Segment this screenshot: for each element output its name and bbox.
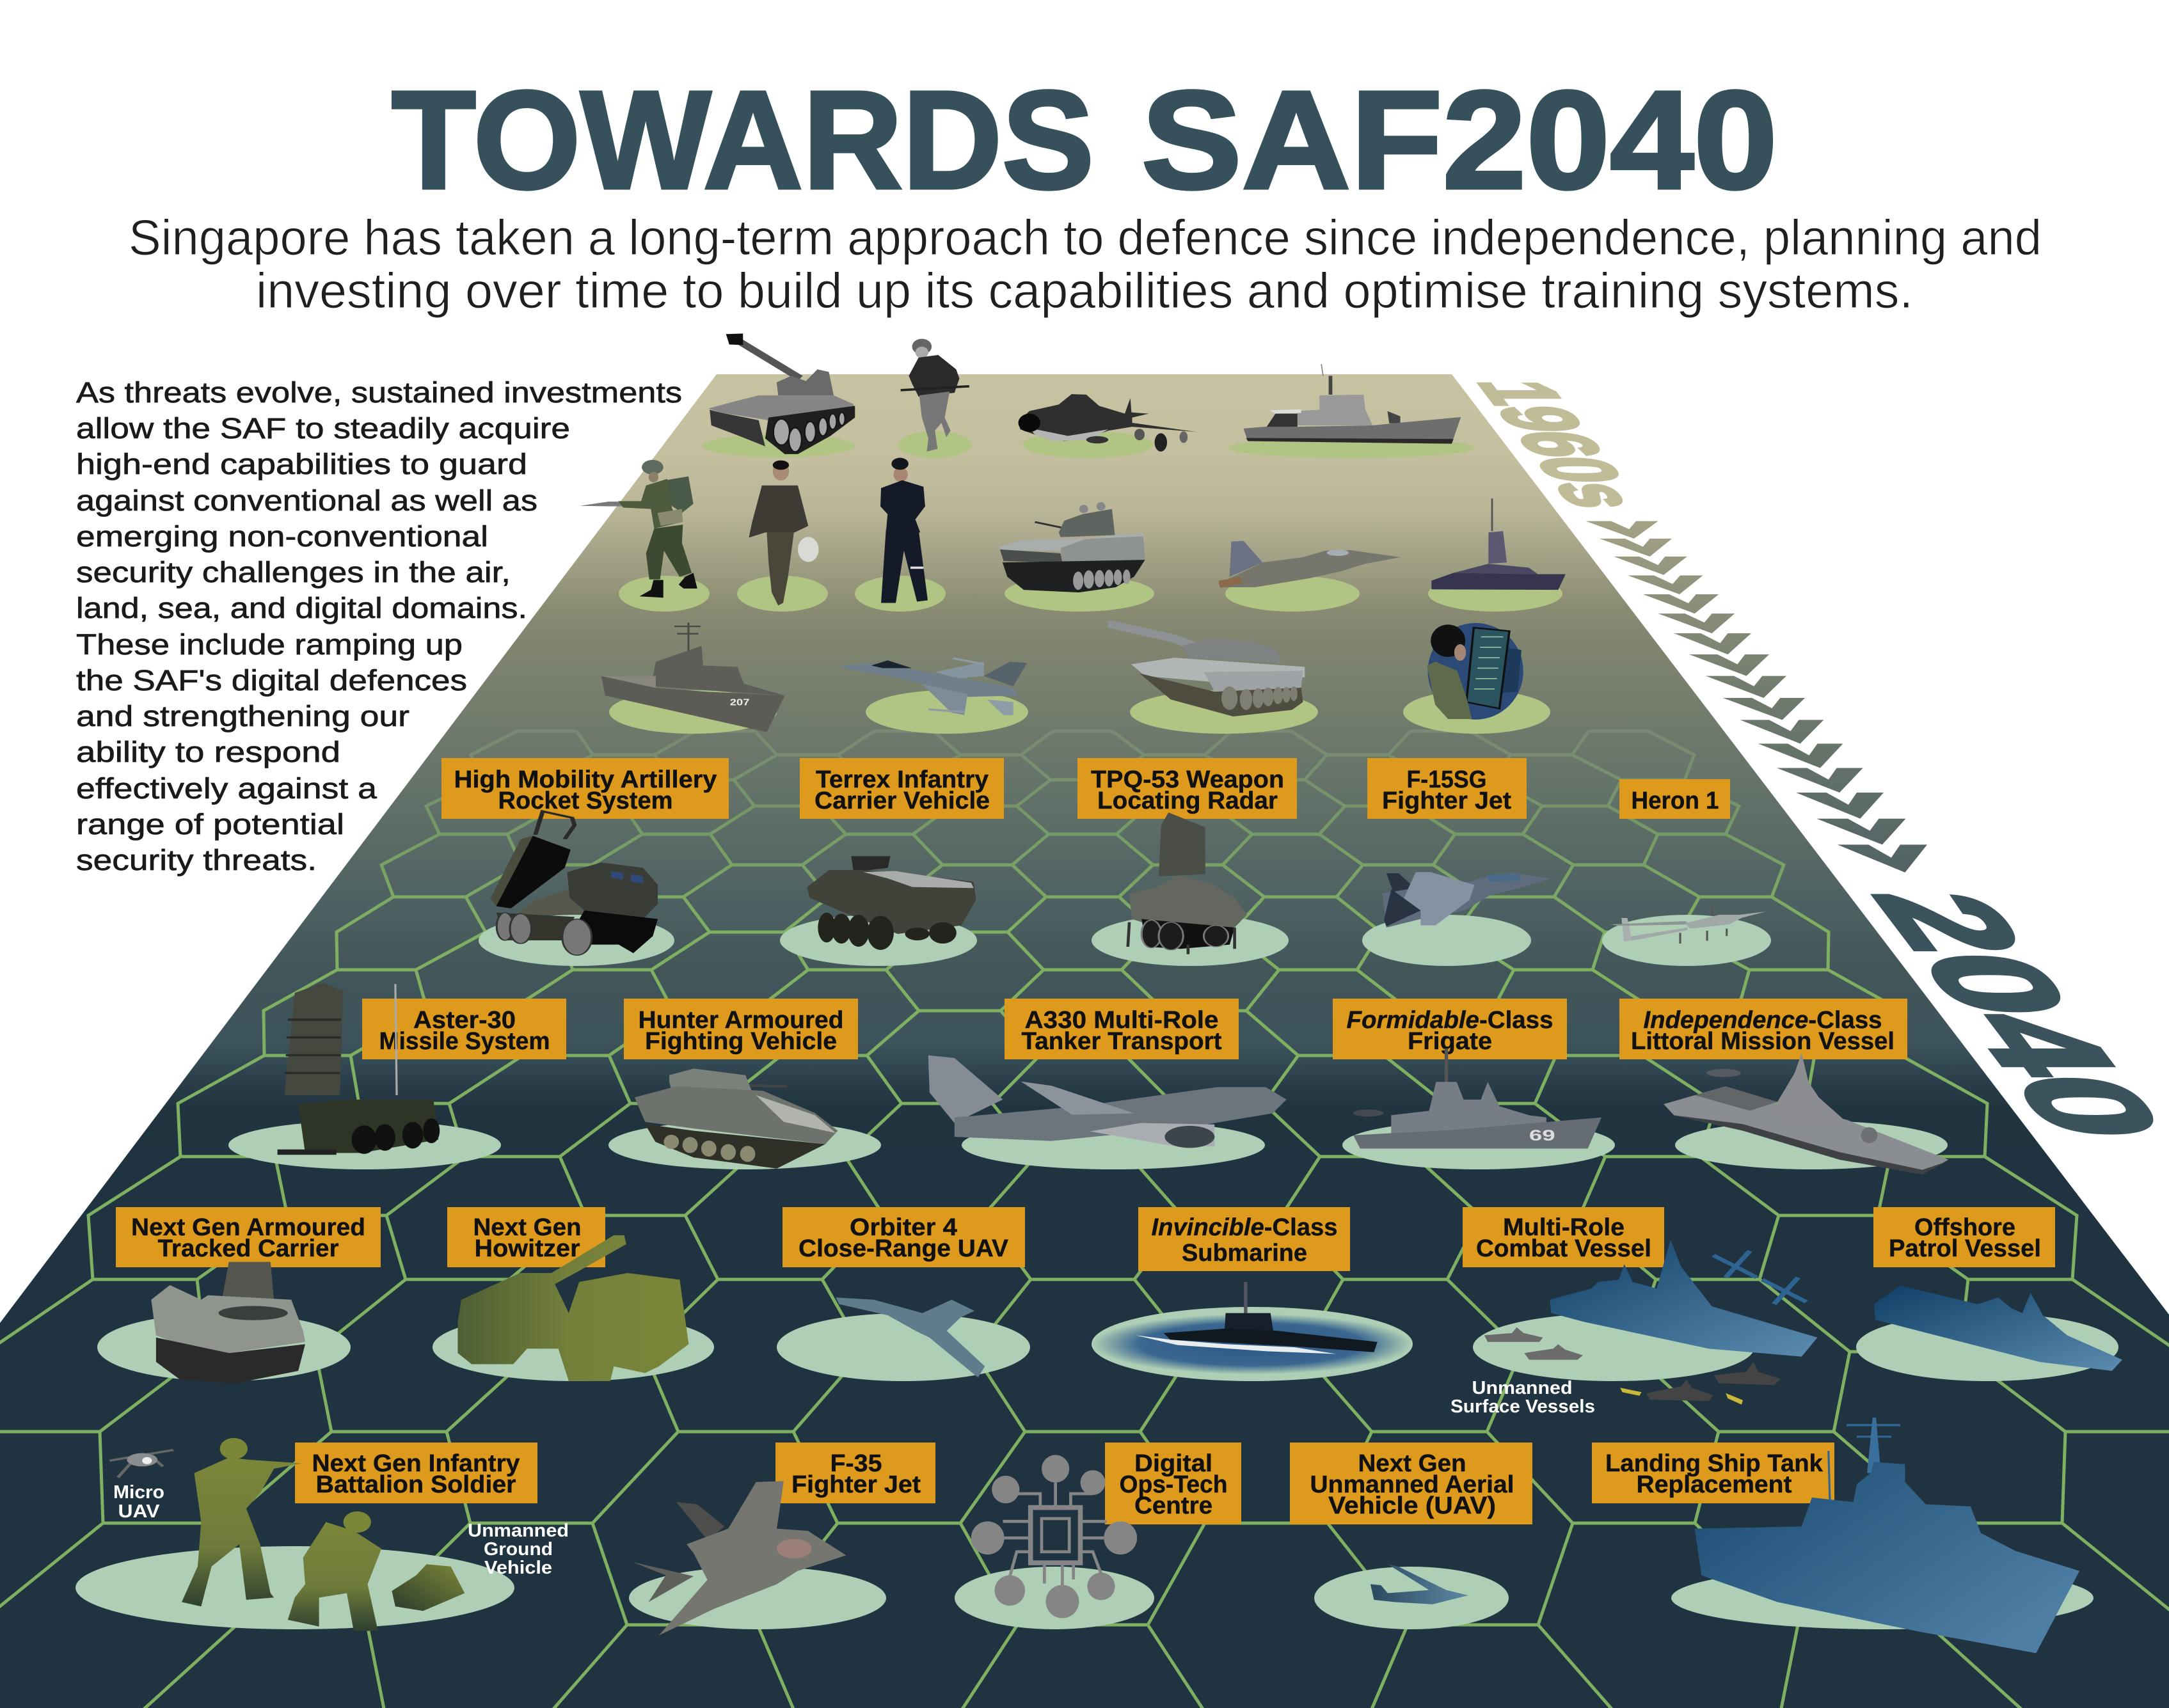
- label: Multi-Role Combat Vessel: Multi-Role: [1503, 1214, 1625, 1241]
- label: Invincible-Class Submarine: [1138, 1207, 1350, 1271]
- timeline label: 1960s: 1960s: [1456, 381, 1664, 508]
- intro paragraph: the SAF's digital defences: [76, 664, 467, 697]
- label: Next Gen Armoured Tracked Carrier: [116, 1207, 381, 1267]
- icon: missile gunboat: [1431, 498, 1566, 590]
- icon: Heron UAV: [1610, 906, 1766, 944]
- label: Next Gen Unmanned Aerial Vehicle (UAV): Vehicle (UAV): [1328, 1492, 1496, 1519]
- intro paragraph: land, sea, and digital domains.: [76, 592, 527, 624]
- icon: TPQ-53 radar: [1128, 812, 1247, 954]
- icon: infantry soldier: [580, 460, 697, 597]
- label: Invincible-Class Submarine: Invincible-Class: [1152, 1214, 1337, 1241]
- label: Next Gen Armoured Tracked Carrier: Next Gen Armoured: [131, 1214, 365, 1241]
- label: F-15SG Fighter Jet: F-15SG: [1406, 766, 1487, 793]
- icon: Next Gen Howitzer silhouette: [457, 1235, 688, 1381]
- icon: A330 tanker: [928, 1056, 1287, 1148]
- icon: Formidable frigate: [1353, 1048, 1601, 1148]
- label: Independence-Class Littoral Mission Vessel: Independence-Class: [1643, 1007, 1882, 1034]
- label: Next Gen Infantry Battalion Soldier: Battalion Soldier: [316, 1471, 516, 1498]
- icon: HIMARS: [490, 811, 658, 955]
- intro paragraph: These include ramping up: [76, 628, 463, 661]
- icon: Hunter jet: [1019, 394, 1196, 452]
- label: Orbiter 4 Close-Range UAV: Orbiter 4: [850, 1214, 957, 1241]
- icon: Next Gen Armoured Tracked Carrier: [151, 1262, 305, 1383]
- icon: air force pilot: [749, 461, 819, 606]
- intro paragraph: security threats.: [76, 844, 317, 876]
- intro paragraph: allow the SAF to steadily acquire: [76, 412, 570, 445]
- icon: Formidable frigate: 69: [1529, 1127, 1555, 1144]
- icon: Leopard tank: [1108, 621, 1305, 716]
- label: Next Gen Unmanned Aerial Vehicle (UAV): Next Gen: [1358, 1450, 1466, 1477]
- text: Unmanned Ground Vehicle: Ground: [484, 1539, 553, 1560]
- label: TPQ-53 Weapon Locating Radar: TPQ-53 Weapon: [1091, 766, 1284, 793]
- label: Next Gen Howitzer: Howitzer: [475, 1235, 580, 1262]
- icon: AMX-13 tank: [709, 333, 855, 454]
- intro paragraph: emerging non-conventional: [76, 520, 488, 553]
- icon: running soldier: [901, 339, 969, 452]
- intro paragraph: ability to respond: [76, 736, 340, 768]
- label: Offshore Patrol Vessel: [1873, 1207, 2055, 1267]
- icon: Orbiter 4 UAV: [836, 1297, 985, 1377]
- label: Next Gen Armoured Tracked Carrier: Tracked Carrier: [157, 1235, 339, 1262]
- label: Next Gen Unmanned Aerial Vehicle (UAV): Unmanned Aerial: [1310, 1471, 1514, 1498]
- label: A330 Multi-Role Tanker Transport: A330 Multi-Role: [1025, 1007, 1218, 1034]
- text: Micro UAV: [113, 1482, 164, 1522]
- icon: patrol boat: [1243, 364, 1461, 444]
- title: TOWARDS: [392, 63, 1094, 218]
- label: Multi-Role Combat Vessel: Combat Vessel: [1476, 1235, 1651, 1262]
- text: Micro UAV: UAV: [118, 1501, 160, 1522]
- label: Terrex Infantry Carrier Vehicle: Terrex Infantry: [816, 766, 989, 793]
- text: Unmanned Surface Vessels: Unmanned: [1472, 1378, 1573, 1398]
- icon: digital circuit network: [971, 1455, 1137, 1618]
- icon: landing ship: [601, 622, 785, 732]
- text: Unmanned Surface Vessels: [1450, 1378, 1595, 1417]
- label: Formidable-Class Frigate: Formidable-Class: [1346, 1007, 1553, 1034]
- icon: Offshore Patrol Vessel silhouette: [1874, 1286, 2122, 1371]
- label: Heron 1: [1619, 779, 1730, 819]
- label: Offshore Patrol Vessel: Offshore: [1914, 1214, 2015, 1241]
- label: Digital Ops-Tech Centre: Centre: [1134, 1492, 1212, 1519]
- icon: Landing Ship Tank Replacement silhouette: [1695, 1418, 2079, 1653]
- label: High Mobility Artillery Rocket System: Rocket System: [498, 787, 673, 814]
- label: Terrex Infantry Carrier Vehicle: [800, 758, 1004, 819]
- text: Unmanned Ground Vehicle: Vehicle: [484, 1558, 552, 1578]
- label: TPQ-53 Weapon Locating Radar: Locating Radar: [1097, 787, 1278, 814]
- intro paragraph: As threats evolve, sustained investments: [76, 376, 682, 409]
- icon: cyber operator: [1427, 623, 1523, 720]
- label: Aster-30 Missile System: [362, 999, 566, 1059]
- label: Digital Ops-Tech Centre: Digital: [1134, 1450, 1212, 1477]
- label: Orbiter 4 Close-Range UAV: Close-Range UAV: [798, 1235, 1009, 1262]
- label: Next Gen Unmanned Aerial Vehicle (UAV): [1290, 1443, 1532, 1524]
- label: Hunter Armoured Fighting Vehicle: Fighting Vehicle: [645, 1028, 837, 1055]
- icon: landing ship: 207: [730, 697, 749, 708]
- icon: Multi-Role Combat Vessel silhouette: [1550, 1240, 1818, 1357]
- subtitle: Singapore has taken a long-term approach to defence since independence, planning and: [129, 209, 2042, 265]
- icon: F-5 fighter: [1218, 541, 1401, 588]
- icon: F-35 fighter: [633, 1481, 846, 1635]
- intro paragraph: high-end capabilities to guard: [76, 448, 527, 480]
- label: F-15SG Fighter Jet: [1367, 758, 1527, 819]
- title: SAF2040: [1141, 63, 1777, 218]
- label: Aster-30 Missile System: Aster-30: [413, 1007, 516, 1034]
- label: Multi-Role Combat Vessel: [1463, 1207, 1664, 1267]
- label: Orbiter 4 Close-Range UAV: [783, 1207, 1025, 1267]
- label: A330 Multi-Role Tanker Transport: Tanker Transport: [1021, 1028, 1222, 1055]
- label: Terrex Infantry Carrier Vehicle: Carrier Vehicle: [814, 787, 990, 814]
- label: Heron 1: Heron 1: [1632, 787, 1719, 814]
- icon: micro UAV: [109, 1450, 173, 1478]
- label: F-15SG Fighter Jet: Fighter Jet: [1382, 787, 1511, 814]
- label: Next Gen Infantry Battalion Soldier: Next Gen Infantry: [312, 1450, 520, 1477]
- subtitle: [129, 209, 2042, 319]
- timeline chevrons: [1585, 521, 1927, 873]
- label: F-35 Fighter Jet: F-35: [830, 1450, 882, 1477]
- label: Formidable-Class Frigate: [1333, 999, 1567, 1059]
- label: Digital Ops-Tech Centre: [1105, 1443, 1241, 1524]
- icon: Hunter AFV: [635, 1068, 838, 1169]
- label: Invincible-Class Submarine: Submarine: [1182, 1240, 1307, 1267]
- label: TPQ-53 Weapon Locating Radar: [1077, 758, 1297, 819]
- label: High Mobility Artillery Rocket System: High Mobility Artillery: [454, 766, 717, 793]
- icon: Next Gen UAV silhouette: [1371, 1564, 1468, 1604]
- label: Landing Ship Tank Replacement: [1592, 1443, 1834, 1503]
- label: F-35 Fighter Jet: Fighter Jet: [791, 1471, 921, 1498]
- icon: Invincible submarine: [1092, 1282, 1412, 1375]
- icon: F-16 fighter: [839, 658, 1027, 715]
- label: Independence-Class Littoral Mission Vessel: Littoral Mission Vessel: [1631, 1028, 1895, 1055]
- intro paragraph: security challenges in the air,: [76, 556, 511, 589]
- label: Independence-Class Littoral Mission Vessel: [1619, 999, 1907, 1059]
- ground ellipses: legacy rows: [609, 431, 1562, 734]
- icon: F-15SG: [1383, 872, 1550, 928]
- icon: unmanned surface vessels: [1484, 1327, 1781, 1405]
- label: Landing Ship Tank Replacement: Replacement: [1637, 1471, 1792, 1498]
- icon: Independence littoral mission vessel: [1664, 1053, 1948, 1174]
- hexagon grid: [0, 731, 2169, 1708]
- subtitle: investing over time to build up its capabilities and optimise training systems.: [256, 262, 1913, 319]
- label: High Mobility Artillery Rocket System: [441, 758, 729, 819]
- label: Formidable-Class Frigate: Frigate: [1408, 1028, 1492, 1055]
- timeline label: 2040: 2040: [1839, 892, 2169, 1137]
- icon: Bionix infantry fighting vehicle: [999, 502, 1145, 592]
- label: Landing Ship Tank Replacement: Landing Ship Tank: [1605, 1450, 1823, 1477]
- label: Offshore Patrol Vessel: Patrol Vessel: [1889, 1235, 2041, 1262]
- intro paragraph: range of potential: [76, 808, 344, 841]
- label: Next Gen Infantry Battalion Soldier: [295, 1443, 537, 1503]
- text: Unmanned Surface Vessels: Surface Vessels: [1450, 1396, 1595, 1417]
- icon: Aster-30 launcher: [278, 983, 440, 1155]
- label: Hunter Armoured Fighting Vehicle: [624, 999, 858, 1059]
- intro paragraph: [76, 376, 682, 876]
- intro paragraph: against conventional as well as: [76, 484, 537, 517]
- text: Micro UAV: Micro: [113, 1482, 164, 1503]
- icon: drones: [1713, 1251, 1806, 1304]
- icon: Terrex vehicle: [807, 856, 976, 950]
- text: Unmanned Ground Vehicle: [468, 1521, 569, 1578]
- label: A330 Multi-Role Tanker Transport: [1005, 999, 1239, 1059]
- label: Hunter Armoured Fighting Vehicle: Hunter Armoured: [639, 1007, 843, 1034]
- title: [392, 63, 1777, 218]
- text: Unmanned Ground Vehicle: Unmanned: [468, 1521, 569, 1541]
- label: Digital Ops-Tech Centre: Ops-Tech: [1120, 1471, 1227, 1498]
- intro paragraph: and strengthening our: [76, 700, 409, 732]
- ground ellipses: future rows: [75, 915, 2118, 1629]
- perspective floor panel: [0, 374, 2169, 1708]
- label: F-35 Fighter Jet: [775, 1443, 935, 1503]
- icon: Next Gen soldiers and ground vehicle silhouettes: [182, 1438, 465, 1631]
- intro paragraph: effectively against a: [76, 772, 377, 805]
- label: Aster-30 Missile System: Missile System: [379, 1028, 550, 1055]
- icon: navy officer: [880, 458, 928, 603]
- label: Next Gen Howitzer: [447, 1207, 605, 1267]
- label: Next Gen Howitzer: Next Gen: [473, 1214, 581, 1241]
